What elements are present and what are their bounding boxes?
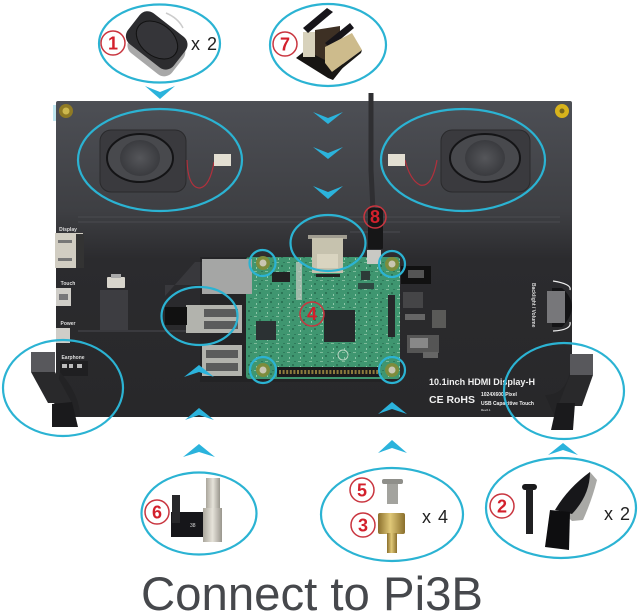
screw heads [260, 260, 396, 374]
earphone jack: Earphone [61, 355, 85, 361]
earphone jack [60, 355, 88, 376]
rotary switch: Backlight / Volume [530, 283, 536, 328]
ethernet port [202, 259, 252, 294]
board silkscreen text: USB Capacitive Touch [481, 401, 534, 407]
speaker right [388, 130, 530, 192]
stand right [545, 354, 593, 430]
left port: touch micro USB [56, 281, 75, 306]
part 2: stand and screw callout [486, 458, 636, 558]
part 1: speaker callout: 1 [108, 34, 118, 54]
ribbon connectors [388, 295, 395, 337]
board silkscreen text: 1024X600 Pixel [481, 392, 517, 398]
board silkscreen text: 10.1inch HDMI Display-H [429, 377, 535, 388]
display board [53, 101, 572, 417]
brass standoff photo [378, 513, 405, 553]
board silkscreen text: Rev2.1 [481, 408, 491, 412]
down arrows [145, 86, 343, 199]
number 4 badge [300, 302, 324, 326]
USB port upper [186, 305, 242, 333]
GPIO header [277, 367, 380, 377]
number 8 badge [364, 206, 386, 228]
part 2: stand and screw callout: 2 [497, 496, 507, 516]
part 6: USB adapter callout: 6 [152, 502, 162, 522]
rotary switch [530, 281, 572, 331]
mounting screw right [555, 104, 569, 118]
left port: HDMI display: Display [59, 227, 77, 233]
number 4 badge: 4 [307, 304, 317, 324]
part 1: speaker callout [99, 4, 220, 82]
stand left [31, 352, 80, 427]
speaker left [100, 130, 231, 192]
board silkscreen text [429, 377, 535, 412]
mounting standoffs [256, 256, 399, 377]
left port: power micro USB [56, 321, 76, 343]
stand bracket photo [545, 472, 597, 550]
parts 5 and 3: screw and standoff callout: 5 [357, 480, 367, 500]
part 7: HDMI connector callout [270, 4, 386, 86]
parts 5 and 3: screw and standoff callout [321, 468, 463, 561]
board components right of Pi [401, 266, 446, 358]
tact button [107, 274, 125, 288]
part 6: USB adapter callout [142, 472, 256, 554]
screw photo [382, 479, 403, 504]
highlight ellipses on board [3, 109, 624, 439]
HDMI cable with micro USB plug [367, 93, 383, 264]
black screw photo [522, 484, 537, 534]
LAN chip [256, 321, 276, 340]
USB adapter photo: 38 [190, 523, 196, 529]
Raspberry Pi 3B [165, 235, 400, 382]
left port: power micro USB: Power [60, 321, 76, 327]
left port: touch micro USB: Touch [61, 281, 75, 287]
mounting screw left [59, 104, 73, 118]
part 1: speaker callout: x 2 [191, 34, 217, 54]
parts 5 and 3: screw and standoff callout: x 4 [422, 507, 448, 527]
board silkscreen text: CE RoHS [429, 395, 475, 406]
up arrows [183, 365, 578, 457]
HDMI adapter photo [296, 8, 362, 80]
SoC chip [324, 310, 355, 342]
part 2: stand and screw callout: x 2 [604, 504, 630, 524]
USB port lower [202, 345, 242, 376]
speaker part photo [122, 7, 192, 80]
part 7: HDMI connector callout: 7 [280, 34, 290, 54]
HDMI adapter [308, 235, 347, 277]
parts 5 and 3: screw and standoff callout: 3 [358, 516, 368, 536]
number 8 badge: 8 [370, 207, 380, 227]
left port: HDMI display [55, 227, 84, 268]
